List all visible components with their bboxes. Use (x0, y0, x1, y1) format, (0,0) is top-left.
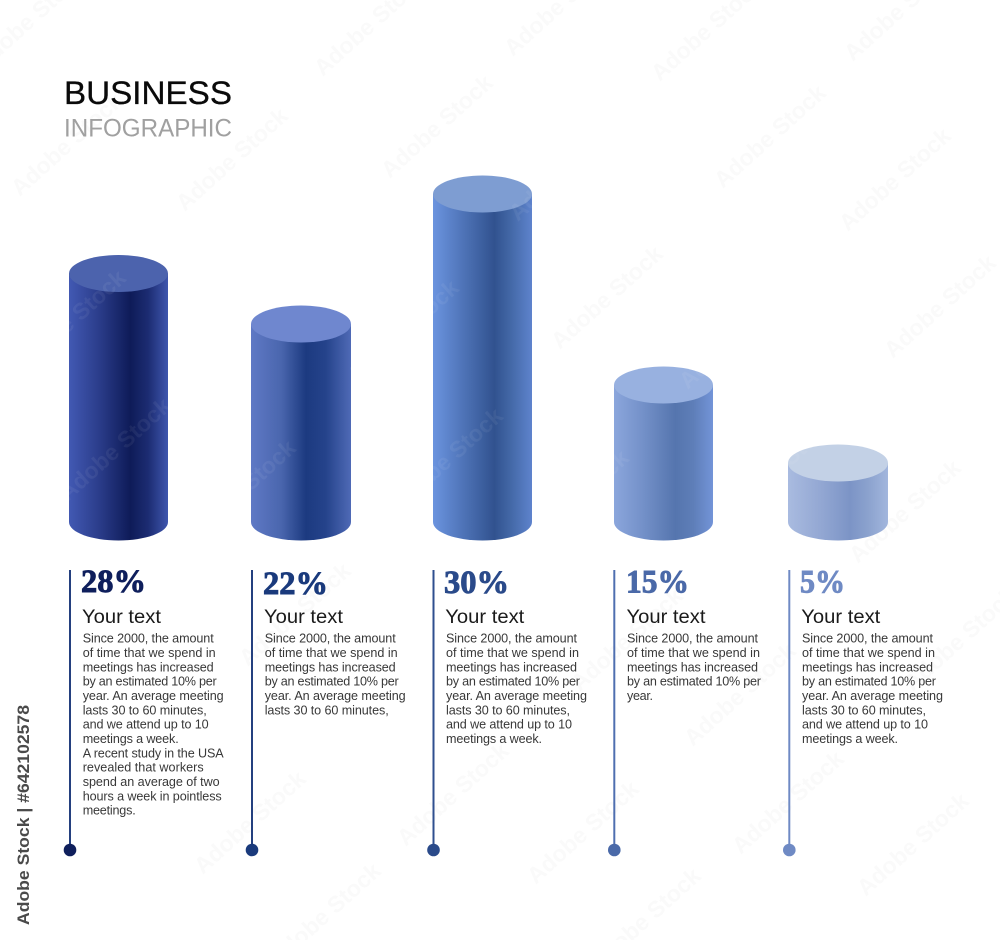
cylinder: 30% (433, 176, 532, 540)
leader line with dot (64, 570, 76, 856)
body text: Since 2000, the amount (83, 632, 214, 646)
watermark overlay on cylinders: Adobe Stock (54, 392, 176, 506)
cylinder: 22% (251, 306, 351, 540)
background watermark pattern: Adobe Stock (679, 637, 801, 751)
body text (83, 632, 224, 818)
heading: Your text (801, 606, 881, 628)
body text: and we attend up to 10 (446, 718, 572, 732)
leader line with dot (246, 570, 258, 856)
heading: Your text (626, 606, 706, 628)
background watermark pattern: Adobe Stock (727, 745, 849, 859)
body text: lasts 30 to 60 minutes, (446, 703, 570, 717)
watermark overlay on cylinders (9, 112, 841, 558)
heading: Your text (445, 606, 525, 628)
watermark overlay on cylinders: Adobe Stock (386, 402, 508, 516)
watermark overlay on cylinders: Adobe Stock (179, 434, 301, 548)
percentage: 5% (800, 564, 845, 600)
background watermark pattern: Adobe Stock (566, 582, 688, 696)
body text (802, 632, 943, 746)
background watermark pattern: Adobe Stock (834, 122, 956, 236)
leader line with dot (783, 570, 796, 856)
heading: Your text (82, 606, 162, 628)
body text: meetings a week. (802, 732, 898, 746)
watermark overlay on cylinders: Adobe Stock (9, 264, 131, 378)
body text: meetings has increased (446, 660, 577, 674)
body text: year. An average meeting (265, 689, 406, 703)
background watermark pattern: Adobe Stock (376, 69, 498, 183)
body text: Since 2000, the amount (446, 632, 578, 646)
percentage: 30% (444, 565, 509, 601)
watermark overlay on cylinders: Adobe Stock (504, 112, 626, 226)
column: 30% (427, 565, 587, 856)
body text (446, 632, 587, 746)
cylinder: 28% (69, 255, 168, 540)
body text: and we attend up to 10 (83, 718, 209, 732)
title (64, 75, 232, 142)
background watermark pattern: Adobe Stock (6, 87, 128, 201)
body text: Since 2000, the amount (802, 632, 934, 646)
subtitle line: INFOGRAPHIC: INFOGRAPHIC (64, 114, 232, 142)
body text: year. (627, 689, 653, 703)
title line: BUSINESS: BUSINESS (64, 75, 232, 111)
cylinder: 15% (614, 366, 713, 540)
body text: of time that we spend in (802, 646, 935, 660)
background watermark pattern: Adobe Stock (234, 557, 356, 671)
column: 5% (783, 564, 943, 856)
body text: spend an average of two (83, 775, 220, 789)
body text: meetings has increased (265, 660, 396, 674)
body text: lasts 30 to 60 minutes, (83, 703, 207, 717)
column: 28% (64, 564, 224, 856)
watermark overlay on cylinders: Adobe Stock (674, 280, 796, 394)
watermark overlay on cylinders: Adobe Stock (216, 230, 338, 344)
body text: revealed that workers (83, 761, 204, 775)
body text: meetings has increased (802, 660, 933, 674)
body text: of time that we spend in (265, 646, 398, 660)
body text: by an estimated 10% per (802, 675, 936, 689)
body text: year. An average meeting (83, 689, 224, 703)
body text: and we attend up to 10 (802, 718, 928, 732)
body text: of time that we spend in (446, 646, 579, 660)
background watermark pattern: Adobe Stock (844, 454, 966, 568)
body text: by an estimated 10% per (627, 675, 761, 689)
heading: Your text (264, 606, 344, 628)
cylinder: 5% (788, 444, 888, 540)
body text: meetings a week. (83, 732, 179, 746)
watermark overlay on cylinders: Adobe Stock (512, 444, 634, 558)
body text: of time that we spend in (83, 646, 216, 660)
background watermark pattern: Adobe Stock (171, 102, 293, 216)
body text: by an estimated 10% per (83, 675, 217, 689)
leader line with dot (427, 570, 440, 856)
background watermark pattern: Adobe Stock (879, 249, 1000, 363)
watermark overlay on cylinders: Adobe Stock (719, 409, 841, 523)
body text: year. An average meeting (802, 689, 943, 703)
body text: lasts 30 to 60 minutes, (802, 703, 926, 717)
body text: Since 2000, the amount (265, 632, 396, 646)
body text (627, 632, 761, 703)
body text: lasts 30 to 60 minutes, (265, 703, 389, 717)
column: 22% (246, 566, 406, 856)
bar chart: 3D cylinders (69, 176, 888, 540)
body text: A recent study in the USA (83, 746, 224, 760)
body text (265, 632, 406, 717)
body text: meetings. (83, 804, 136, 818)
leader line with dot (608, 570, 621, 856)
background watermark pattern: Adobe Stock (546, 240, 668, 354)
body text: Since 2000, the amount (627, 632, 758, 646)
background watermark pattern: Adobe Stock (709, 79, 831, 193)
percentage: 15% (626, 564, 689, 600)
watermark overlay on cylinders: Adobe Stock (342, 274, 464, 388)
body text: hours a week in pointless (83, 789, 222, 803)
stock credit label: Adobe Stock | #642102578 (14, 705, 33, 925)
body text: of time that we spend in (627, 646, 760, 660)
body text: meetings has increased (83, 660, 214, 674)
percentage: 28% (81, 564, 146, 600)
body text: by an estimated 10% per (446, 675, 580, 689)
background watermark pattern: Adobe Stock (189, 765, 311, 879)
column: 15% (608, 564, 761, 856)
body text: meetings a week. (446, 732, 542, 746)
body text: meetings has increased (627, 660, 758, 674)
background watermark pattern: Adobe Stock (392, 737, 514, 851)
percentage: 22% (263, 566, 328, 602)
background watermark pattern: Adobe Stock (522, 775, 644, 889)
body text: year. An average meeting (446, 689, 587, 703)
background watermark pattern: Adobe Stock (852, 787, 974, 901)
body text: by an estimated 10% per (265, 675, 399, 689)
